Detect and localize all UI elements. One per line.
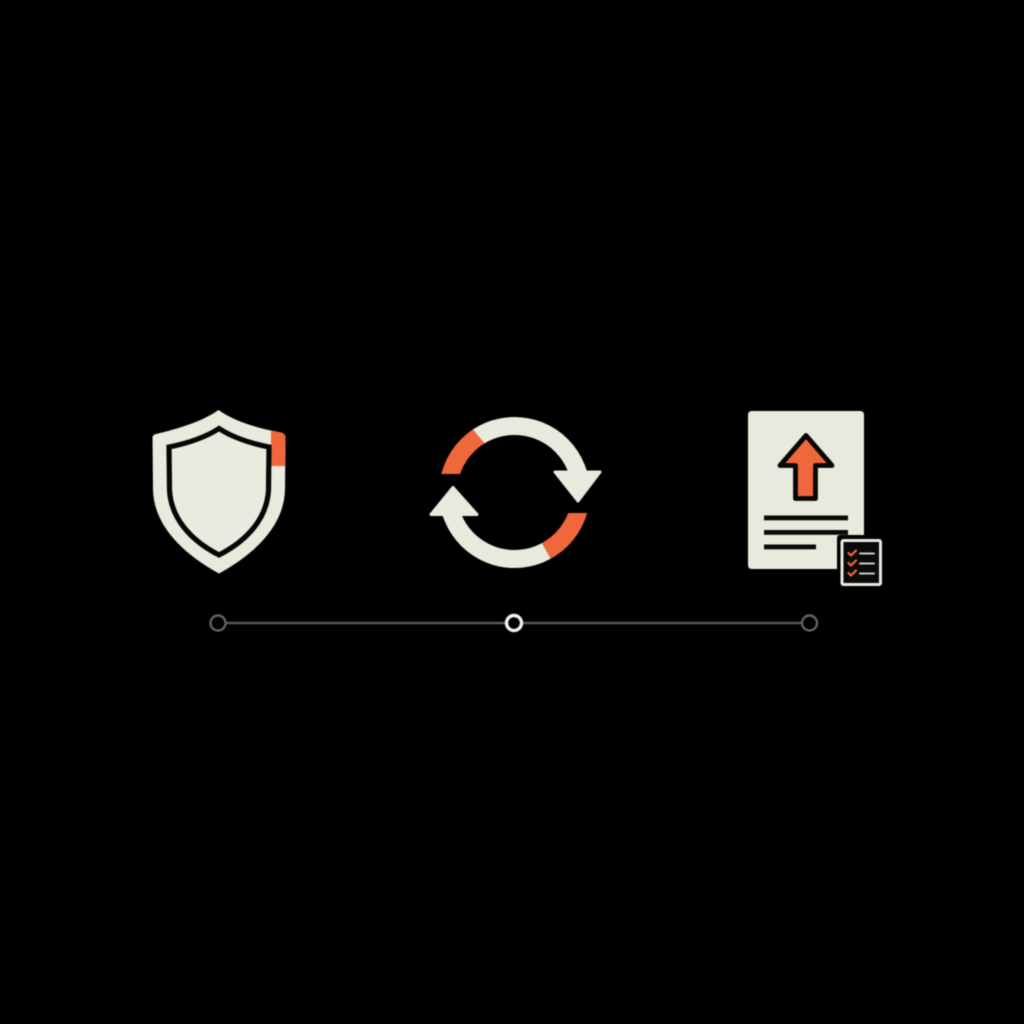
infographic canvas — [152, 410, 883, 633]
timeline node center active — [506, 616, 522, 630]
checklist badge — [837, 535, 885, 589]
icon: shield — [152, 410, 287, 574]
timeline node left — [210, 616, 226, 630]
timeline — [210, 616, 817, 630]
timeline line — [226, 622, 801, 624]
lower arc orange segment — [542, 512, 588, 560]
document page — [748, 411, 864, 569]
lower arrow head — [431, 488, 477, 514]
shield inner outline — [169, 428, 269, 555]
upper arc orange segment — [440, 429, 485, 475]
checklist items — [848, 550, 874, 576]
icon: circular arrows — [431, 426, 600, 559]
icon: upload document — [748, 411, 885, 589]
upload arrow — [780, 436, 832, 498]
document text lines — [764, 516, 848, 549]
upper arc cream — [472, 416, 588, 472]
timeline node right — [802, 616, 817, 630]
lower arc cream — [442, 515, 552, 569]
shield orange accent — [271, 428, 287, 466]
upper arrow head — [555, 472, 600, 501]
shield body — [152, 410, 286, 574]
